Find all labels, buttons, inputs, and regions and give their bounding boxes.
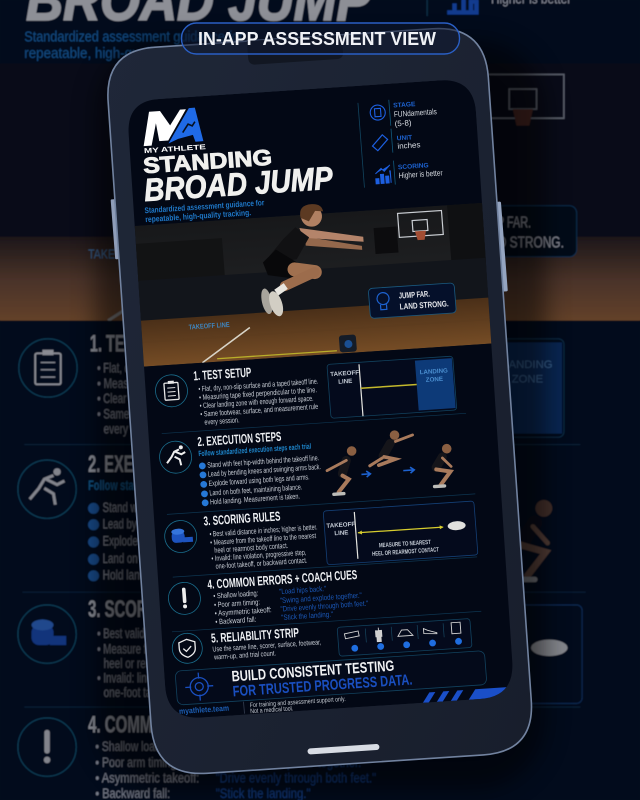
errors list xyxy=(213,588,273,626)
background section 1: 1. TEST SETUP xyxy=(90,332,196,358)
background section 2: 2. EXECUTION STEPS xyxy=(88,452,241,478)
label: in-app assessment view: IN-APP ASSESSMENT VIEW xyxy=(198,29,436,49)
bullets: • Best valid distance in inches; higher is better. xyxy=(209,522,318,539)
background section 2: Explode forward using both legs and arms. xyxy=(103,533,287,549)
title xyxy=(144,149,333,202)
background meta: scoring xyxy=(427,0,571,16)
hero photo xyxy=(135,203,492,366)
footer disclaimer: Not a medical tool. xyxy=(250,705,294,715)
figure: flight xyxy=(367,429,415,466)
subtitle xyxy=(144,198,266,224)
errors list: • Backward fall: xyxy=(215,615,257,626)
section 1: test setup xyxy=(155,356,457,426)
coach cues list: "Stick the landing." xyxy=(281,610,334,622)
bullets: • Measure from the takeoff line to the nearest xyxy=(210,531,317,547)
bullets xyxy=(198,377,321,427)
background callout xyxy=(420,206,577,257)
text: stage: STAGE xyxy=(393,101,416,110)
subheading: Follow standardized execution steps each trial xyxy=(198,442,311,458)
bullets: • Flat, dry, non-slip surface and a taped takeoff line. xyxy=(198,377,319,394)
side button: right xyxy=(494,202,508,292)
icon: ruler xyxy=(373,135,388,151)
background section 1 xyxy=(19,332,564,437)
diagram: measurement xyxy=(323,501,478,565)
errors list: • Poor arm timing: xyxy=(214,597,260,609)
bullets: every session. xyxy=(204,415,240,427)
icon: stage xyxy=(370,105,386,121)
arrow xyxy=(361,471,371,477)
background hero photo: TAKEOFF LINE xyxy=(88,247,163,262)
background section 2: Follow standardized execution steps each trial xyxy=(88,478,294,494)
coach cues list: "Load hips back." xyxy=(279,584,327,596)
description: Use the same line, scorer, surface, footwear, xyxy=(212,637,322,654)
checklist: Stand with feet hip-width behind the takeoff line. xyxy=(207,453,319,470)
arrow xyxy=(403,467,414,474)
callout: jump far, land strong xyxy=(368,283,456,318)
home indicator xyxy=(307,744,380,755)
diagram: setup: LINE xyxy=(338,378,353,386)
diagram: measurement: MEASURE TO NEAREST xyxy=(379,539,431,549)
call to action banner: BUILD CONSISTENT TESTING xyxy=(231,658,395,685)
background section 1: • Measuring tape fixed perpendicular to the line. xyxy=(97,375,312,391)
diagram: measurement: TAKEOFF xyxy=(326,521,356,530)
icon: exclamation xyxy=(167,581,202,615)
bullets: • Same footwear, surface, and measurement rule xyxy=(200,402,318,419)
logo: My Athlete: MY ATHLETE xyxy=(144,144,207,155)
background section 1: ZONE xyxy=(512,374,544,386)
icon: footprint xyxy=(447,521,466,531)
description: warm-up, and trial count. xyxy=(213,648,276,662)
camera notch xyxy=(247,35,344,65)
icon: light bulb xyxy=(377,292,390,310)
text: stage xyxy=(394,102,437,128)
background header title xyxy=(24,0,371,62)
icon: tape measure xyxy=(163,519,198,554)
background section 4: • Shallow loading: xyxy=(95,738,177,754)
call to action banner: FOR TRUSTED PROGRESS DATA. xyxy=(232,671,413,700)
heading: 5. RELIABILITY STRIP xyxy=(210,625,300,646)
text: unit xyxy=(396,134,420,149)
diagram: setup: LANDING xyxy=(419,367,448,376)
diagram: setup: TAKEOFF xyxy=(330,369,360,378)
text: scoring: Higher is better xyxy=(398,168,443,180)
bullets: heel or rearmost body contact. xyxy=(214,541,289,555)
bullets: • Invalid: line violation, progressive step, xyxy=(211,548,307,563)
background header title: Standardized assessment guidance for xyxy=(24,29,243,46)
background section 1: LANDING xyxy=(502,359,553,371)
checklist: Hold landing. Measurement is taken. xyxy=(210,492,300,506)
icon: shield xyxy=(171,632,203,664)
background section 2: Hold landing. Measurement is taken. xyxy=(103,566,267,582)
strip panel: icons with checks xyxy=(337,619,472,656)
meta panel: stage, unit, scoring xyxy=(358,97,444,188)
background section 4: "Swing and explode together." xyxy=(216,754,365,770)
bullets: one-foot takeoff, or backward contact. xyxy=(215,556,308,571)
footer disclaimer xyxy=(250,696,347,715)
background section 2 xyxy=(18,452,552,582)
text: unit: inches xyxy=(397,140,421,151)
background callout: LAND STRONG. xyxy=(475,235,564,252)
heading: 4. COMMON ERRORS + COACH CUES xyxy=(207,567,358,592)
background section 1: every session. xyxy=(104,421,167,437)
background section 2: Land on both feet, maintaining balance. xyxy=(103,550,272,566)
footer website: myathlete.team xyxy=(179,704,229,716)
text: unit: UNIT xyxy=(397,134,412,142)
checklist: Explode forward using both legs and arms. xyxy=(208,472,310,488)
errors list: • Asymmetric takeoff: xyxy=(214,605,272,618)
bullets xyxy=(210,524,318,569)
background section 4: "Load hips back." xyxy=(216,738,301,754)
diagram: setup xyxy=(327,356,457,418)
figure: landing xyxy=(431,444,454,487)
subtitle: Standardized assessment guidance for xyxy=(144,198,265,215)
checklist: Lead by bending knees and swinging arms back. xyxy=(208,462,321,479)
background section 3: • Measure from the takeoff line to the nearest xyxy=(97,640,291,656)
callout: jump far, land strong: JUMP FAR. xyxy=(398,289,430,301)
coach cues list: "Drive evenly through both feet." xyxy=(280,599,369,614)
section 3: scoring rules xyxy=(164,500,478,569)
footer stripes xyxy=(421,687,513,704)
phone shadow xyxy=(96,40,546,790)
label: takeoff line: TAKEOFF LINE xyxy=(188,322,230,332)
label: in-app assessment view xyxy=(182,23,460,54)
heading: 1. TEST SETUP xyxy=(193,364,252,383)
coach cues list xyxy=(279,581,370,622)
icon: clipboard xyxy=(154,374,189,408)
heading: 3. SCORING RULES xyxy=(203,508,281,528)
background section 2: Stand with feet hip-width behind the takeoff line. xyxy=(103,499,307,515)
section 5: reliability strip xyxy=(171,614,472,667)
background section 3: 3. SCORING RULES xyxy=(88,597,228,623)
background hero photo xyxy=(0,64,640,321)
heading: 2. EXECUTION STEPS xyxy=(197,429,282,449)
tape measure device xyxy=(339,334,357,353)
bullets: • Clear landing zone with enough forward space. xyxy=(199,394,314,410)
icon: target xyxy=(184,672,214,701)
diagram: measurement: HEEL OR REARMOST CONTACT xyxy=(372,546,439,558)
background section 3: • Best valid distance in inches; higher is better. xyxy=(97,625,294,641)
background callout: JUMP FAR. xyxy=(475,215,531,232)
icon: scoring chart xyxy=(375,165,391,184)
background section 3: heel or rearmost body contact. xyxy=(104,655,238,671)
title: STANDING xyxy=(142,145,273,178)
side button: left xyxy=(111,199,121,259)
background section 3: one-foot takeoff, or backward contact. xyxy=(104,684,271,700)
callout: jump far, land strong: LAND STRONG. xyxy=(399,298,449,311)
phone mockup xyxy=(99,25,543,777)
background section 4: • Poor arm timing: xyxy=(95,754,179,770)
errors list: • Shallow loading: xyxy=(213,589,259,600)
background section 3: • Invalid: line violation, progressive step, xyxy=(97,669,270,685)
text: scoring: SCORING xyxy=(398,162,429,171)
description xyxy=(212,637,322,662)
title: BROAD JUMP xyxy=(143,160,335,208)
diagram: measurement: LINE xyxy=(334,529,349,537)
subtitle: repeatable, high-quality tracking. xyxy=(145,208,251,224)
background section 4: 4. COMMON ERRORS + COACH CUES xyxy=(88,713,362,739)
takeoff line and tape xyxy=(200,327,252,363)
call to action banner xyxy=(175,651,487,705)
icon: runner xyxy=(158,440,193,474)
figure: load xyxy=(325,446,360,495)
phone screen xyxy=(116,78,528,725)
diagram: setup: ZONE xyxy=(426,376,443,384)
background section 3 xyxy=(18,597,582,703)
checklist xyxy=(199,453,323,507)
checklist: Land on both feet, maintaining balance. xyxy=(209,482,303,498)
footer disclaimer: For training and assessment support only. xyxy=(250,696,346,709)
bullets: • Measuring tape fixed perpendicular to the line. xyxy=(199,385,317,402)
background section 2: Lead by bending knees and swinging arms back. xyxy=(103,515,309,531)
text: scoring xyxy=(398,162,442,180)
background section 4: • Asymmetric takeoff: xyxy=(95,770,199,786)
section 4: common errors and coach cues xyxy=(167,566,370,629)
text: stage: (5-8) xyxy=(394,118,412,128)
background section 4: "Drive evenly through both feet." xyxy=(216,770,376,786)
background section 1: • Clear landing zone with enough forward space. xyxy=(97,390,305,406)
background section 1: • Flat, dry, non-slip surface and a taped takeoff line. xyxy=(97,360,316,376)
background header title: repeatable, high-quality tracking. xyxy=(24,45,218,62)
athlete jumping xyxy=(261,204,364,316)
text: stage: FUNdamentals xyxy=(394,107,437,119)
coach cues list: "Swing and explode together." xyxy=(280,591,362,605)
background section 4 xyxy=(18,713,376,800)
background section 1: • Same footwear, surface, and measurement rule xyxy=(97,405,313,421)
section 2: execution steps xyxy=(159,430,454,506)
logo: My Athlete xyxy=(141,107,207,155)
phone body xyxy=(99,25,540,777)
